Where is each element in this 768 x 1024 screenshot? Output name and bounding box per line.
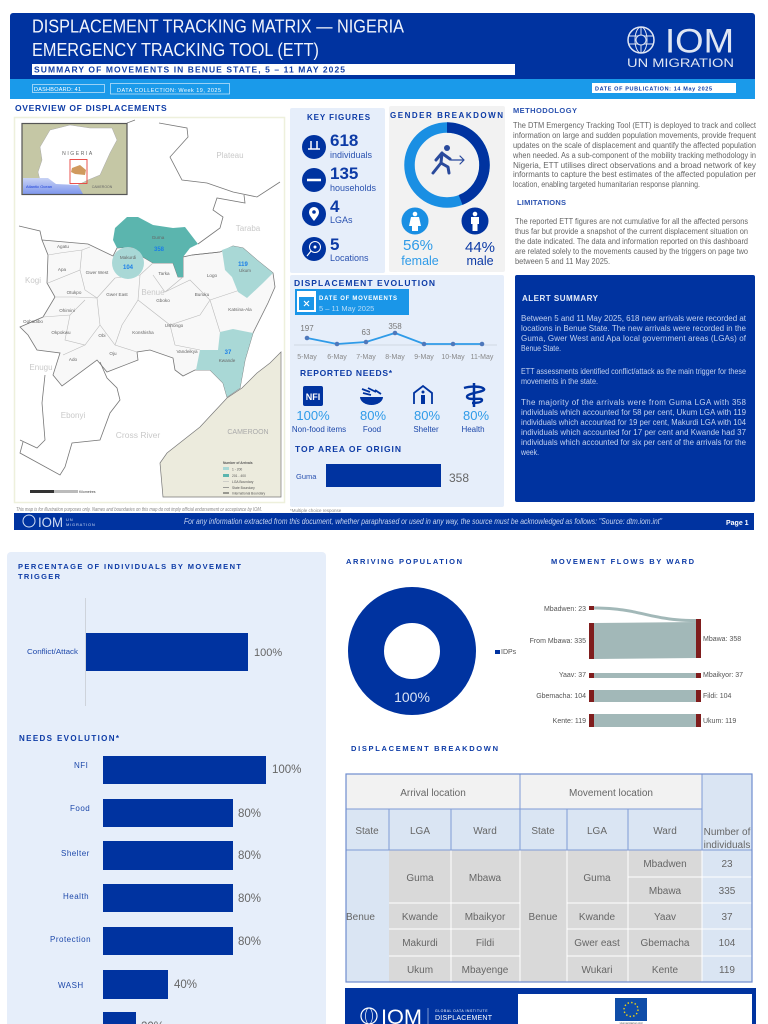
need: NFI: NFI (306, 392, 320, 402)
bar chart: top area of origin (296, 464, 469, 487)
line chart: arrivals by day: 10-May (441, 354, 465, 361)
bar chart: needs evolution: Shelter (61, 849, 90, 858)
need: shelter (413, 386, 440, 434)
heading: methodology: METHODOLOGY (513, 106, 577, 115)
heading: overview of displacements: OVERVIEW OF DISPLACEMENTS (15, 103, 167, 113)
title: EMERGENCY TRACKING TOOL (ETT) (32, 40, 319, 60)
table: displacement breakdown: 119 (719, 965, 735, 976)
footer bar: page 1: For any information extracted from this document, whether paraphrased or used in any way, the source must be acknowledged as follows: "Source: dtm.iom.int" (184, 517, 663, 526)
need: health: 80% (463, 408, 489, 423)
panel: displacement evolution (290, 275, 504, 507)
table: displacement breakdown: 104 (719, 938, 736, 949)
heading: reported needs: REPORTED NEEDS* (300, 368, 393, 378)
text: methodology: The DTM Emergency Tracking Tool (ETT) is deployed to track and collect (513, 121, 757, 130)
line chart: arrivals by day: 358 (388, 322, 402, 331)
table: displacement breakdown: Ward (653, 826, 677, 837)
LGA labels: Agatu (57, 244, 69, 249)
Makurdi LGA (112, 247, 144, 279)
panel: movement trigger and needs evolution (7, 552, 326, 1024)
male figure: 44% (465, 239, 495, 256)
table: displacement breakdown: Mbawa (469, 873, 502, 884)
need: NFI (292, 386, 346, 434)
table: displacement breakdown: 23 (721, 859, 733, 870)
heading: top area of origin: TOP AREA OF ORIGIN (295, 444, 401, 454)
line chart: arrivals by day (294, 322, 497, 361)
text: methodology: informants to capture the best estimates of the affected population per (513, 170, 756, 179)
need: food: Food (363, 425, 381, 434)
bar chart: needs evolution: Health (63, 892, 89, 901)
sankey chart: movement flows by ward: Ukum: 119 (703, 718, 736, 725)
inset locator map: Atlantic Ocean (26, 184, 52, 189)
title: DISPLACEMENT TRACKING MATRIX — NIGERIA (32, 16, 404, 36)
table: displacement breakdown: Arrival location (400, 788, 466, 799)
bar chart: needs evolution: 80% (238, 893, 261, 905)
female figure: 56% (403, 237, 433, 254)
LGA labels: 119 (238, 262, 248, 268)
table: displacement breakdown: 37 (721, 912, 733, 923)
line chart: arrivals by day: 8-May (385, 354, 405, 361)
LGA labels: Ado (69, 357, 78, 362)
table: displacement breakdown: Guma (583, 873, 611, 884)
figure: locations (302, 235, 369, 263)
text: limitations: thus far but provide a snapshot of the current displacement situation on (515, 227, 748, 236)
table: displacement breakdown: Movement location (569, 788, 653, 799)
female figure: female (401, 254, 439, 268)
heading: needs evolution: NEEDS EVOLUTION* (19, 734, 120, 743)
bar chart: needs evolution: 80% (238, 936, 261, 948)
LGA labels: Obi (98, 333, 106, 338)
date of movements box (295, 289, 409, 315)
publication date: DATE OF PUBLICATION: 14 May 2025 (595, 86, 712, 92)
table: displacement breakdown: Guma (406, 873, 434, 884)
state labels: Cross River (116, 430, 160, 440)
icon: person moving (433, 145, 464, 173)
need: NFI: Non-food items (292, 425, 346, 434)
bar chart: movement trigger: 100% (254, 647, 282, 659)
LGA labels: Gwer West (86, 270, 109, 275)
text: alert summary: ETT assessments identified conflict/attack as the main trigger for these (521, 367, 746, 376)
IOM logo: IOM (665, 22, 734, 60)
publication date (592, 83, 736, 93)
table: displacement breakdown (346, 774, 752, 982)
state labels: CAMEROON (227, 429, 269, 436)
map legend: Number of Arrivals (223, 461, 253, 465)
text: alert summary: The majority of the arrivals were from Guma LGA with 358 (521, 398, 747, 407)
LGA labels: Ukum (239, 268, 251, 273)
line chart: arrivals by day: 63 (362, 328, 371, 337)
state labels: Enugu (29, 363, 53, 372)
need: NFI: 100% (296, 408, 330, 423)
bar chart: movement trigger (27, 598, 282, 706)
sankey chart: movement flows by ward: Kente: 119 (553, 718, 586, 725)
panel: key figures (290, 108, 385, 273)
table: displacement breakdown: Wukari (582, 965, 612, 976)
text: alert summary: locations in Benue State. The new arrivals were recorded in the (521, 324, 747, 333)
figure: households (302, 164, 377, 193)
bar chart: needs evolution: 40% (174, 979, 197, 991)
line chart: arrivals by day: 197 (300, 324, 314, 333)
text: methodology (512, 121, 757, 189)
LGA boundaries (43, 247, 240, 355)
figure: individuals (302, 131, 373, 160)
dashboard number (32, 84, 104, 93)
map legend (223, 461, 266, 496)
sankey chart: movement flows by ward: Yaav: 37 (559, 672, 586, 679)
table: displacement breakdown: individuals (704, 840, 750, 851)
text: limitations (515, 217, 748, 266)
neighbouring state boundaries (19, 120, 280, 475)
Guma LGA (113, 217, 198, 277)
heading: gender breakdown: GENDER BREAKDOWN (390, 111, 503, 120)
text: alert summary: Between 5 and 11 May 2025, 618 new arrivals were recorded at (521, 314, 747, 323)
LGA labels: Otukpo (67, 290, 82, 295)
sankey chart: movement flows by ward (530, 606, 743, 727)
table: displacement breakdown: Mbawa (649, 886, 682, 897)
sankey chart: movement flows by ward: Mbadwen: 23 (544, 606, 586, 613)
text: alert summary: Guma, Gwer West and Apa local government areas (LGAs) of (521, 334, 747, 343)
heading: displacement breakdown: DISPLACEMENT BREAKDOWN (351, 744, 498, 753)
heading: movement trigger: PERCENTAGE OF INDIVIDUALS BY MOVEMENT (18, 562, 241, 571)
LGA labels: Konshisha (132, 330, 154, 335)
state labels: Plateau (216, 151, 244, 160)
female figure (401, 208, 439, 268)
dashboard number: DASHBOARD: 41 (34, 87, 81, 93)
state labels: Ebonyi (61, 411, 85, 420)
map scale bar: Kilometres (79, 490, 96, 494)
text: alert summary: Benue State. (521, 344, 561, 353)
donut chart: gender (410, 128, 484, 202)
sankey chart: movement flows by ward: Gbemacha: 104 (536, 693, 586, 700)
male figure: male (466, 254, 494, 268)
bar chart: movement trigger: Conflict/Attack (27, 647, 78, 656)
table: displacement breakdown: Mbadwen (643, 859, 687, 870)
footer bar: page 1: UN (66, 517, 73, 522)
line chart: arrivals by day: 7-May (356, 354, 376, 361)
table: displacement breakdown: Mbayenge (462, 965, 509, 976)
heading: movement trigger: TRIGGER (18, 572, 61, 581)
Benue state LGAs (20, 240, 275, 397)
inset locator map: NIGERIA (62, 151, 94, 157)
heading: movement flows by ward: MOVEMENT FLOWS BY WARD (551, 557, 695, 566)
figure: individuals: 618 (330, 131, 358, 150)
state labels: Benue (141, 288, 165, 297)
text: alert summary: individuals which accounted for 58 per cent, Ukum LGA with 119 (521, 408, 747, 417)
LGA labels: Katsina-Ala (228, 307, 252, 312)
heading: arriving population: ARRIVING POPULATION (346, 557, 462, 566)
LGA labels: Makurdi (120, 255, 136, 260)
text: limitations: are related solely to the movements caused by the triggers on page two (515, 247, 748, 256)
LGA labels: Guma (152, 235, 165, 240)
heading: movement trigger (18, 562, 241, 581)
text: alert summary: movements in the state. (521, 377, 598, 386)
IOM logo: UN MIGRATION (627, 58, 734, 70)
LGA labels: Ohimini (59, 308, 75, 313)
Kwande LGA (196, 329, 253, 397)
table: displacement breakdown: State (531, 826, 555, 837)
header banner (10, 13, 755, 99)
IOM DTM logo (361, 1006, 493, 1024)
bar chart: needs evolution: WASH (58, 981, 84, 990)
need: health (461, 383, 489, 434)
bar chart: needs evolution (50, 756, 301, 1024)
heading: key figures: KEY FIGURES (307, 113, 371, 122)
table: displacement breakdown: Yaav (654, 912, 676, 923)
figure: households: households (330, 183, 377, 193)
sankey chart: movement flows by ward: Fildi: 104 (703, 693, 732, 700)
bar chart: needs evolution: 80% (238, 850, 261, 862)
IOM logo (627, 22, 734, 70)
table: displacement breakdown: State (355, 826, 379, 837)
text: alert summary: individuals which accounted for 19 per cent, Makurdi LGA with 104 (521, 418, 747, 427)
table: displacement breakdown: Gwer east (574, 938, 620, 949)
bar chart: needs evolution: Protection (50, 935, 91, 944)
text: methodology: updates on the scale of displacement and quantify the affected population (513, 141, 756, 150)
figure: LGAs: 4 (330, 197, 340, 216)
text: alert summary: week. (520, 448, 539, 457)
state labels: Taraba (236, 224, 261, 233)
map scale bar (30, 490, 96, 494)
text: limitations: the date indicated. The data and information reported on this dashboard (515, 237, 748, 246)
bar chart: top area of origin: Guma (296, 472, 317, 481)
data collection (110, 84, 230, 94)
LGA labels: 104 (123, 265, 134, 271)
bar chart: needs evolution: 80% (238, 808, 261, 820)
need: shelter: Shelter (413, 425, 439, 434)
line chart: arrivals by day: 11-May (471, 354, 494, 361)
LGA labels: Buruku (195, 292, 210, 297)
line chart: arrivals by day: 6-May (327, 354, 347, 361)
IOM DTM logo: DISPLACEMENT (435, 1015, 493, 1022)
table: displacement breakdown: Kwande (402, 912, 439, 923)
panel: gender breakdown (389, 106, 505, 272)
LGA labels: Gboko (156, 298, 170, 303)
heading: alert summary: ALERT SUMMARY (522, 294, 599, 303)
line chart: arrivals by day: 9-May (414, 354, 434, 361)
map legend: 201 - 400 (232, 474, 246, 478)
text: alert summary: individuals which accounted for six per cent of the arrivals for the (521, 438, 747, 447)
LGA labels: Logo (207, 273, 218, 278)
figure: individuals: individuals (330, 150, 373, 160)
text: alert summary (520, 314, 747, 457)
panel: map of Benue State (14, 118, 284, 502)
heading: limitations: LIMITATIONS (517, 198, 566, 207)
state labels: Kogi (25, 276, 41, 285)
need: food: 80% (360, 408, 386, 423)
date of movements box: 5 – 11 May 2025 (319, 304, 374, 313)
table: displacement breakdown: Benue (346, 912, 375, 923)
map legend: State Boundary (232, 486, 255, 490)
donor logo panel (518, 994, 752, 1024)
table: displacement breakdown: LGA (410, 826, 430, 837)
Cameroon area (160, 352, 281, 497)
text: methodology: information on large and sudden population movements, provide frequent (513, 131, 757, 140)
map legend: 1 - 200 (232, 468, 242, 472)
text: methodology: Nigeria, ETT utilises direct observations and a broad network of key (513, 161, 756, 170)
table: displacement breakdown: Makurdi (402, 938, 438, 949)
IOM DTM logo: GLOBAL DATA INSTITUTE (435, 1009, 488, 1013)
footer bar: page 1 (14, 513, 754, 530)
table: displacement breakdown: Kente (652, 965, 679, 976)
text: alert summary: individuals which accounted for 17 per cent and Kwande had 37 (521, 428, 747, 437)
figure: LGAs: LGAs (330, 215, 353, 225)
footer bar: page 1: IOM (38, 514, 63, 530)
LGA labels: Kwande (219, 358, 236, 363)
footnote: multiple response: *Multiple choice response (290, 508, 342, 513)
male figure (462, 208, 495, 268)
line chart: arrivals by day: 5-May (297, 354, 317, 361)
sankey chart: movement flows by ward: Mbaikyor: 37 (703, 672, 743, 679)
date of movements box: DATE OF MOVEMENTS (319, 296, 397, 302)
figure: households: 135 (330, 164, 358, 183)
map legend: LGA Boundary (232, 480, 254, 484)
footer bar: page 1: Page 1 (726, 520, 749, 527)
state labels (25, 151, 269, 440)
figure: locations: Locations (330, 253, 369, 263)
text: limitations: The reported ETT figures are not cumulative for all the affected persons (515, 217, 748, 226)
bar chart: top area of origin: 358 (449, 471, 469, 485)
figure: LGAs (302, 197, 353, 226)
need: food (360, 388, 386, 434)
LGA labels: Tarka (158, 271, 170, 276)
footer banner: IOM and donor logos (345, 988, 756, 1024)
donut chart: arriving population: IDPs (501, 649, 517, 656)
sankey chart: movement flows by ward: Mbawa: 358 (703, 636, 741, 643)
figure: locations: 5 (330, 235, 339, 254)
LGA labels: 358 (154, 247, 165, 253)
LGA labels: Ushongo (165, 323, 184, 328)
table: displacement breakdown: Ukum (407, 965, 433, 976)
LGA labels: Vandeikya (176, 349, 198, 354)
map disclaimer: This map is for illustration purposes only. Names and boundaries on this map do not imply official endorsement or acceptance by IOM. (16, 507, 262, 513)
text: limitations: between 5 and 11 May 2025. (515, 257, 610, 266)
title (32, 16, 404, 60)
table: displacement breakdown: LGA (587, 826, 607, 837)
text: methodology: location, enabling targeted humanitarian response planning. (513, 180, 700, 189)
bar chart: needs evolution: Food (70, 804, 90, 813)
table: displacement breakdown: Gbemacha (641, 938, 690, 949)
need: health: Health (461, 425, 485, 434)
table: displacement breakdown: Kwande (579, 912, 616, 923)
heading: displacement evolution: DISPLACEMENT EVOLUTION (294, 278, 435, 288)
subtitle (32, 64, 515, 75)
table: displacement breakdown: Number of (704, 827, 751, 838)
LGA labels: Oju (109, 351, 117, 356)
LGA labels: Apa (58, 267, 67, 272)
sankey chart: movement flows by ward: From Mbawa: 335 (530, 638, 586, 645)
LGA labels: Ogbadibo (23, 319, 43, 324)
table: displacement breakdown: Benue (529, 912, 558, 923)
LGA labels (23, 235, 252, 363)
map legend: International Boundary (232, 492, 266, 496)
panel: alert summary (515, 275, 755, 502)
table: displacement breakdown: Mbaikyor (465, 912, 506, 923)
inset locator map: CAMEROON (92, 185, 113, 189)
LGA labels: Gwer East (106, 292, 128, 297)
subtitle: SUMMARY OF MOVEMENTS IN BENUE STATE, 5 – 11 MAY 2025 (34, 64, 345, 74)
LGA labels: Okpokwu (51, 330, 71, 335)
table: displacement breakdown: Ward (473, 826, 497, 837)
data collection: DATA COLLECTION: Week 19, 2025 (117, 88, 221, 94)
bar chart: needs evolution: 100% (272, 764, 301, 776)
LGA labels: 37 (225, 350, 232, 356)
donut chart: arriving population: 100% (394, 689, 430, 705)
bar chart: needs evolution: NFI (74, 761, 88, 770)
table: displacement breakdown: Fildi (476, 938, 494, 949)
inset locator map (22, 124, 127, 194)
need: shelter: 80% (414, 408, 440, 423)
Ukum LGA (222, 246, 273, 298)
donut chart: arriving population (366, 605, 517, 705)
footer bar: page 1: MIGRATION (66, 522, 96, 527)
table: displacement breakdown: 335 (719, 886, 736, 897)
